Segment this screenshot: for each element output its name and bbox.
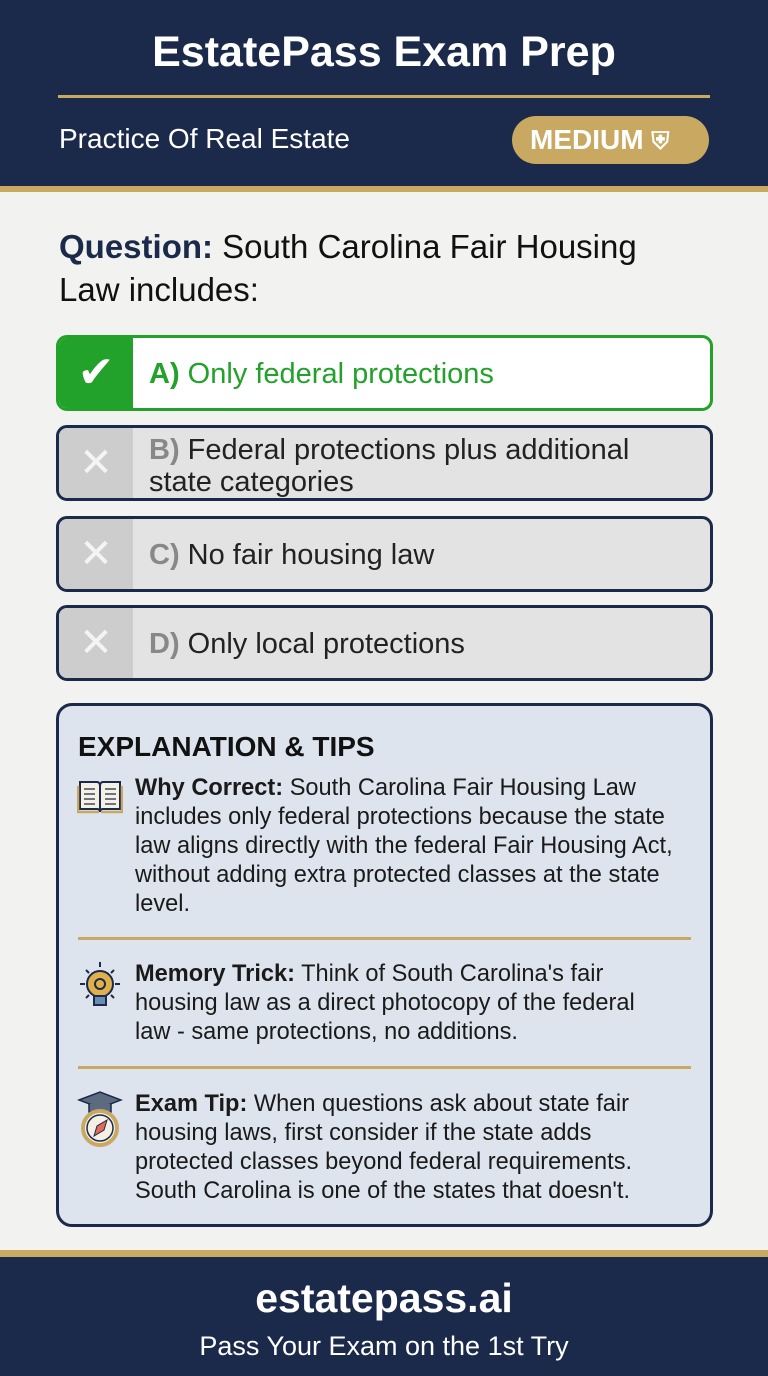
- footer tagline: Pass Your Exam on the 1st Try: [199, 1331, 569, 1361]
- option B: B) Federal protections plus additional state categories: [149, 434, 629, 498]
- icon: book: [77, 781, 123, 814]
- option D: ✕: [79, 621, 113, 665]
- text: memory trick: Memory Trick: Think of South Carolina's fair housing law as a direct photocopy of the federal law - same protections, no additions.: [135, 961, 635, 1045]
- icon: check: ✔: [78, 348, 114, 397]
- option D: [56, 605, 713, 681]
- option D: D) Only local protections: [149, 628, 465, 660]
- footer brand: estatepass.ai: [255, 1275, 513, 1321]
- icon: check: [59, 338, 133, 408]
- badge: medium: MEDIUM ⛨: [530, 124, 669, 155]
- text: why correct: Why Correct: South Carolina Fair Housing Law includes only federal protections because the state law aligns directly with the federal Fair Housing Act, without adding extra protected classes at the state level.: [135, 775, 673, 917]
- subtitle: Practice Of Real Estate: [59, 123, 350, 154]
- badge: medium: [512, 116, 709, 164]
- option C: [56, 516, 713, 592]
- panel: explanation: [56, 703, 713, 1227]
- option B: [56, 425, 713, 501]
- option B: ✕: [79, 441, 113, 485]
- option C: C) No fair housing law: [149, 539, 434, 571]
- option A correct: [56, 335, 713, 411]
- explanation heading: EXPLANATION & TIPS: [78, 731, 375, 762]
- icon: grad cap compass: [77, 1091, 123, 1147]
- text: exam tip: Exam Tip: When questions ask about state fair housing laws, first consider if the state adds protected classes beyond federal requirements. South Carolina is one of the states that doesn't.: [135, 1091, 632, 1204]
- option A correct: A) Only federal protections: [149, 358, 494, 390]
- footer: [0, 1250, 768, 1376]
- title: EstatePass Exam Prep: [152, 28, 616, 76]
- icon: lightbulb: [80, 962, 120, 1006]
- header: [0, 0, 768, 192]
- question: Question: South Carolina Fair Housing Law includes:: [59, 228, 637, 308]
- option C: ✕: [79, 532, 113, 576]
